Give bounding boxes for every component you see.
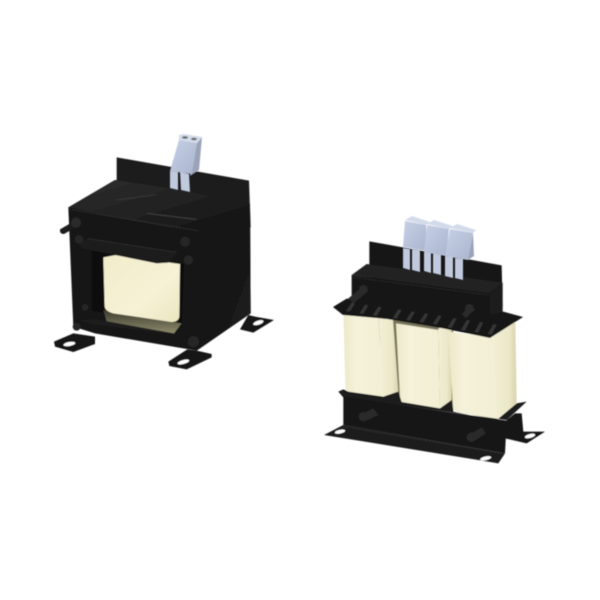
body silhouette [68,180,251,351]
terminal 3 [445,224,476,280]
back mounting foot [240,315,274,333]
front left stud [60,218,81,234]
left terminal block [170,134,202,192]
lower clamp flange [80,319,173,333]
base flange [324,425,505,463]
right side face [197,205,251,351]
rear plate [369,241,503,307]
coil [103,255,180,322]
terminal 2 [424,220,453,275]
top bolts [348,285,475,318]
upper insulation flange [333,299,523,338]
rear foot bracket [505,413,545,443]
right transformer: three phase [324,241,545,463]
front left foot [54,333,95,352]
window backing [92,251,184,327]
left transformer: single phase [54,157,274,369]
left coil [343,312,398,397]
top face [68,180,250,234]
flange ribs [346,303,497,335]
front right foot [168,349,212,369]
right coil [448,322,517,420]
winding inner floor [103,310,182,333]
yoke front [352,275,490,327]
rear plate [117,157,251,227]
yoke top face [352,264,503,294]
lower bracket flange [338,389,527,420]
terminal 1 [403,216,430,272]
coil gap backing [377,317,453,410]
upper clamp flange [78,237,178,263]
bracket bolts [359,408,486,442]
middle coil [396,323,452,408]
right terminal blocks [403,216,476,280]
bracket front plate [343,397,507,453]
bolts [73,235,199,347]
